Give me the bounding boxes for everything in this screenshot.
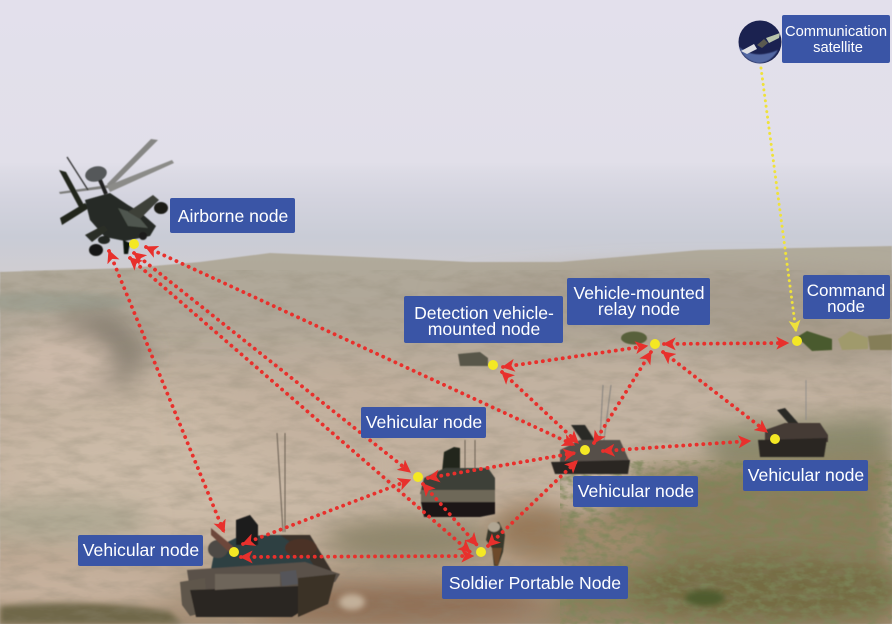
label: communication satellite: Communication [785,24,887,40]
image: detection vehicle [458,352,488,366]
label: communication satellite: satellite [813,40,863,56]
label: command node [803,275,890,319]
label: command node: Command [807,281,885,300]
label: soldier portable node: Soldier Portable Node [449,573,621,593]
label: vehicle-mounted relay node: Vehicle-mounted [573,283,705,303]
label: soldier portable node [442,566,628,599]
label: vehicular node, far right: Vehicular node [748,465,864,485]
label: detection vehicle-mounted node: Detection vehicle- [414,303,554,323]
label: vehicular node, front: Vehicular node [83,540,199,560]
label: airborne node: Airborne node [178,206,288,226]
label: vehicular node, far right [743,460,868,491]
image: relay vehicle in bush [621,332,647,344]
image: helicopter [59,139,174,256]
image: far right tank [758,380,828,457]
image: command tents [797,331,892,351]
label: vehicle-mounted relay node [567,278,710,325]
label: vehicular node, front [78,535,203,566]
label: vehicle-mounted relay node: relay node [598,299,680,319]
image: soldier [486,522,505,566]
icon: communication satellite [738,20,782,64]
label: command node: node [827,297,865,316]
label: detection vehicle-mounted node [404,296,563,343]
label: vehicular node, middle [361,407,486,438]
label: communication satellite [782,15,890,63]
image: right centre tank [551,385,630,474]
label: detection vehicle-mounted node: mounted node [428,319,540,339]
label: airborne node [170,198,295,233]
node markers [129,239,802,557]
label: vehicular node, right centre: Vehicular node [578,481,694,501]
image: front tank [180,433,365,617]
label: vehicular node, right centre [573,476,698,507]
arrow: satellite to command node [761,68,796,331]
label: vehicular node, middle: Vehicular node [366,412,482,432]
network links between nodes [109,247,788,557]
image: middle tank [420,440,495,517]
